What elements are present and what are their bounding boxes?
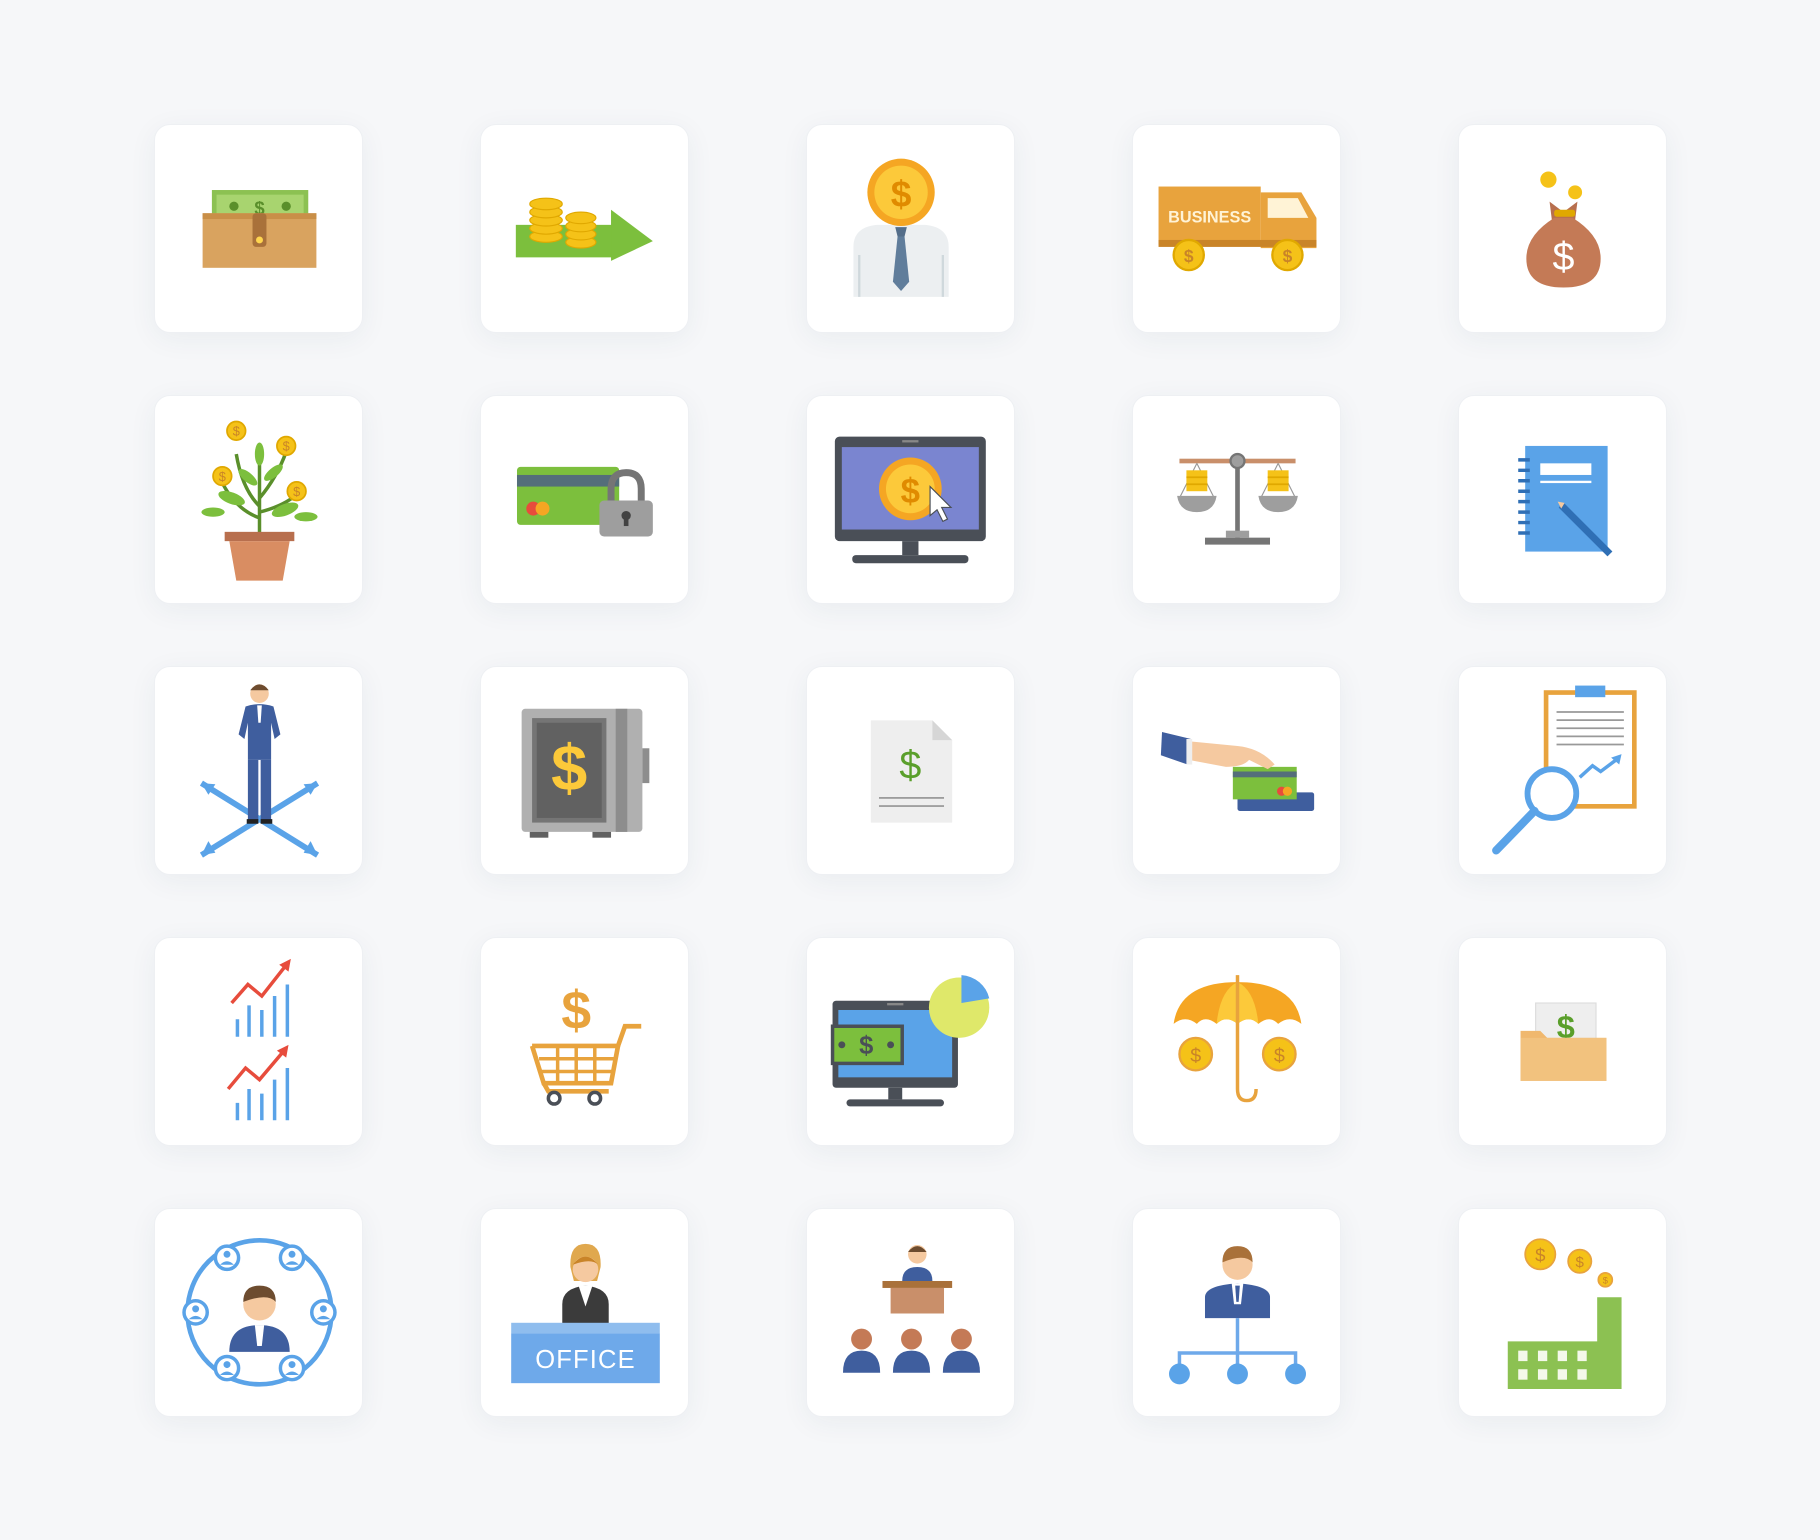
icon: factory: $: [1576, 1254, 1585, 1271]
icon: plant with coins: $: [293, 484, 300, 499]
tile: growth charts: [154, 937, 363, 1146]
icon: wallet: [203, 190, 316, 268]
icon: umbrella: $: [1190, 1045, 1201, 1067]
icon: plant with coins: $: [233, 423, 240, 438]
tile: notebook with pencil: [1458, 395, 1667, 604]
icon: monitor with coin and cursor: [835, 437, 986, 563]
icon: two bar charts: [228, 959, 291, 1120]
icon: coin-head man: $: [891, 172, 912, 214]
tile: coin head businessman: [806, 124, 1015, 333]
icon: finance monitor: [833, 975, 989, 1106]
icon: locked card: [517, 467, 653, 536]
tile: monitor with cash and pie: [806, 937, 1015, 1146]
icon: network of people: [184, 1240, 335, 1384]
icon: umbrella: $: [1274, 1045, 1285, 1067]
icon: notebook: [1518, 446, 1610, 554]
tile: businessman crossroads: [154, 666, 363, 875]
icon: wallet: $: [254, 197, 265, 218]
tile: invoice document: [806, 666, 1015, 875]
tile: coins arrow: [480, 124, 689, 333]
icon: monitor with coin and cursor: $: [901, 472, 920, 511]
tile: presenter and audience: [806, 1208, 1015, 1417]
icon: coin-head man: [853, 159, 949, 297]
icon: cart: [532, 982, 641, 1104]
icon: cart: $: [561, 982, 591, 1041]
tile: office receptionist: [480, 1208, 689, 1417]
tile: money plant: [154, 395, 363, 604]
icon: money bag: $: [1553, 235, 1575, 279]
tile: people network: [154, 1208, 363, 1417]
icon: safe: [522, 709, 649, 838]
tile: folder with money: [1458, 937, 1667, 1146]
icon: folder: $: [1557, 1009, 1575, 1045]
icon: money bag: [1526, 171, 1601, 288]
icon: scale: [1177, 454, 1298, 545]
icon: plant with coins: $: [283, 439, 290, 454]
icon: truck: [1159, 187, 1316, 270]
tile: factory with coins: [1458, 1208, 1667, 1417]
icon: factory: $: [1535, 1244, 1546, 1265]
tile: hand with card: [1132, 666, 1341, 875]
tile: shopping cart dollar: [480, 937, 689, 1146]
icon: manager org chart: [1169, 1246, 1306, 1384]
icon: factory: [1508, 1239, 1622, 1389]
icon: presentation: [843, 1245, 980, 1373]
icon: clipboard with magnifier: [1496, 686, 1634, 850]
icon: safe: $: [551, 731, 587, 804]
tile: clipboard analysis: [1458, 666, 1667, 875]
tile: umbrella with coins: [1132, 937, 1341, 1146]
icon: man with arrows: [201, 684, 318, 855]
icon: office desk with woman: OFFICE: [535, 1346, 636, 1374]
icon: document: [871, 720, 952, 823]
icon: truck: BUSINESS: [1168, 209, 1251, 227]
tile: safe: [480, 666, 689, 875]
tile: business truck: [1132, 124, 1341, 333]
icon: umbrella: [1174, 975, 1301, 1101]
icon: folder: [1521, 1003, 1606, 1081]
icon: office desk with woman: [511, 1244, 660, 1383]
icon: hand payment: [1161, 732, 1314, 811]
tile: hierarchy: [1132, 1208, 1341, 1417]
icon: factory: $: [1603, 1275, 1608, 1285]
tile: card with lock: [480, 395, 689, 604]
tile: money bag: [1458, 124, 1667, 333]
icon: plant with coins: [201, 422, 318, 581]
icon: document: $: [899, 743, 921, 787]
tile: wallet with cash: [154, 124, 363, 333]
icon: truck: $: [1283, 246, 1293, 266]
tile: online payment monitor: [806, 395, 1015, 604]
icon: finance monitor: $: [859, 1032, 873, 1060]
icon: green arrow with coin stacks: [516, 198, 653, 261]
icon: plant with coins: $: [219, 469, 226, 484]
tile: balance scale: [1132, 395, 1341, 604]
icon: truck: $: [1184, 246, 1194, 266]
